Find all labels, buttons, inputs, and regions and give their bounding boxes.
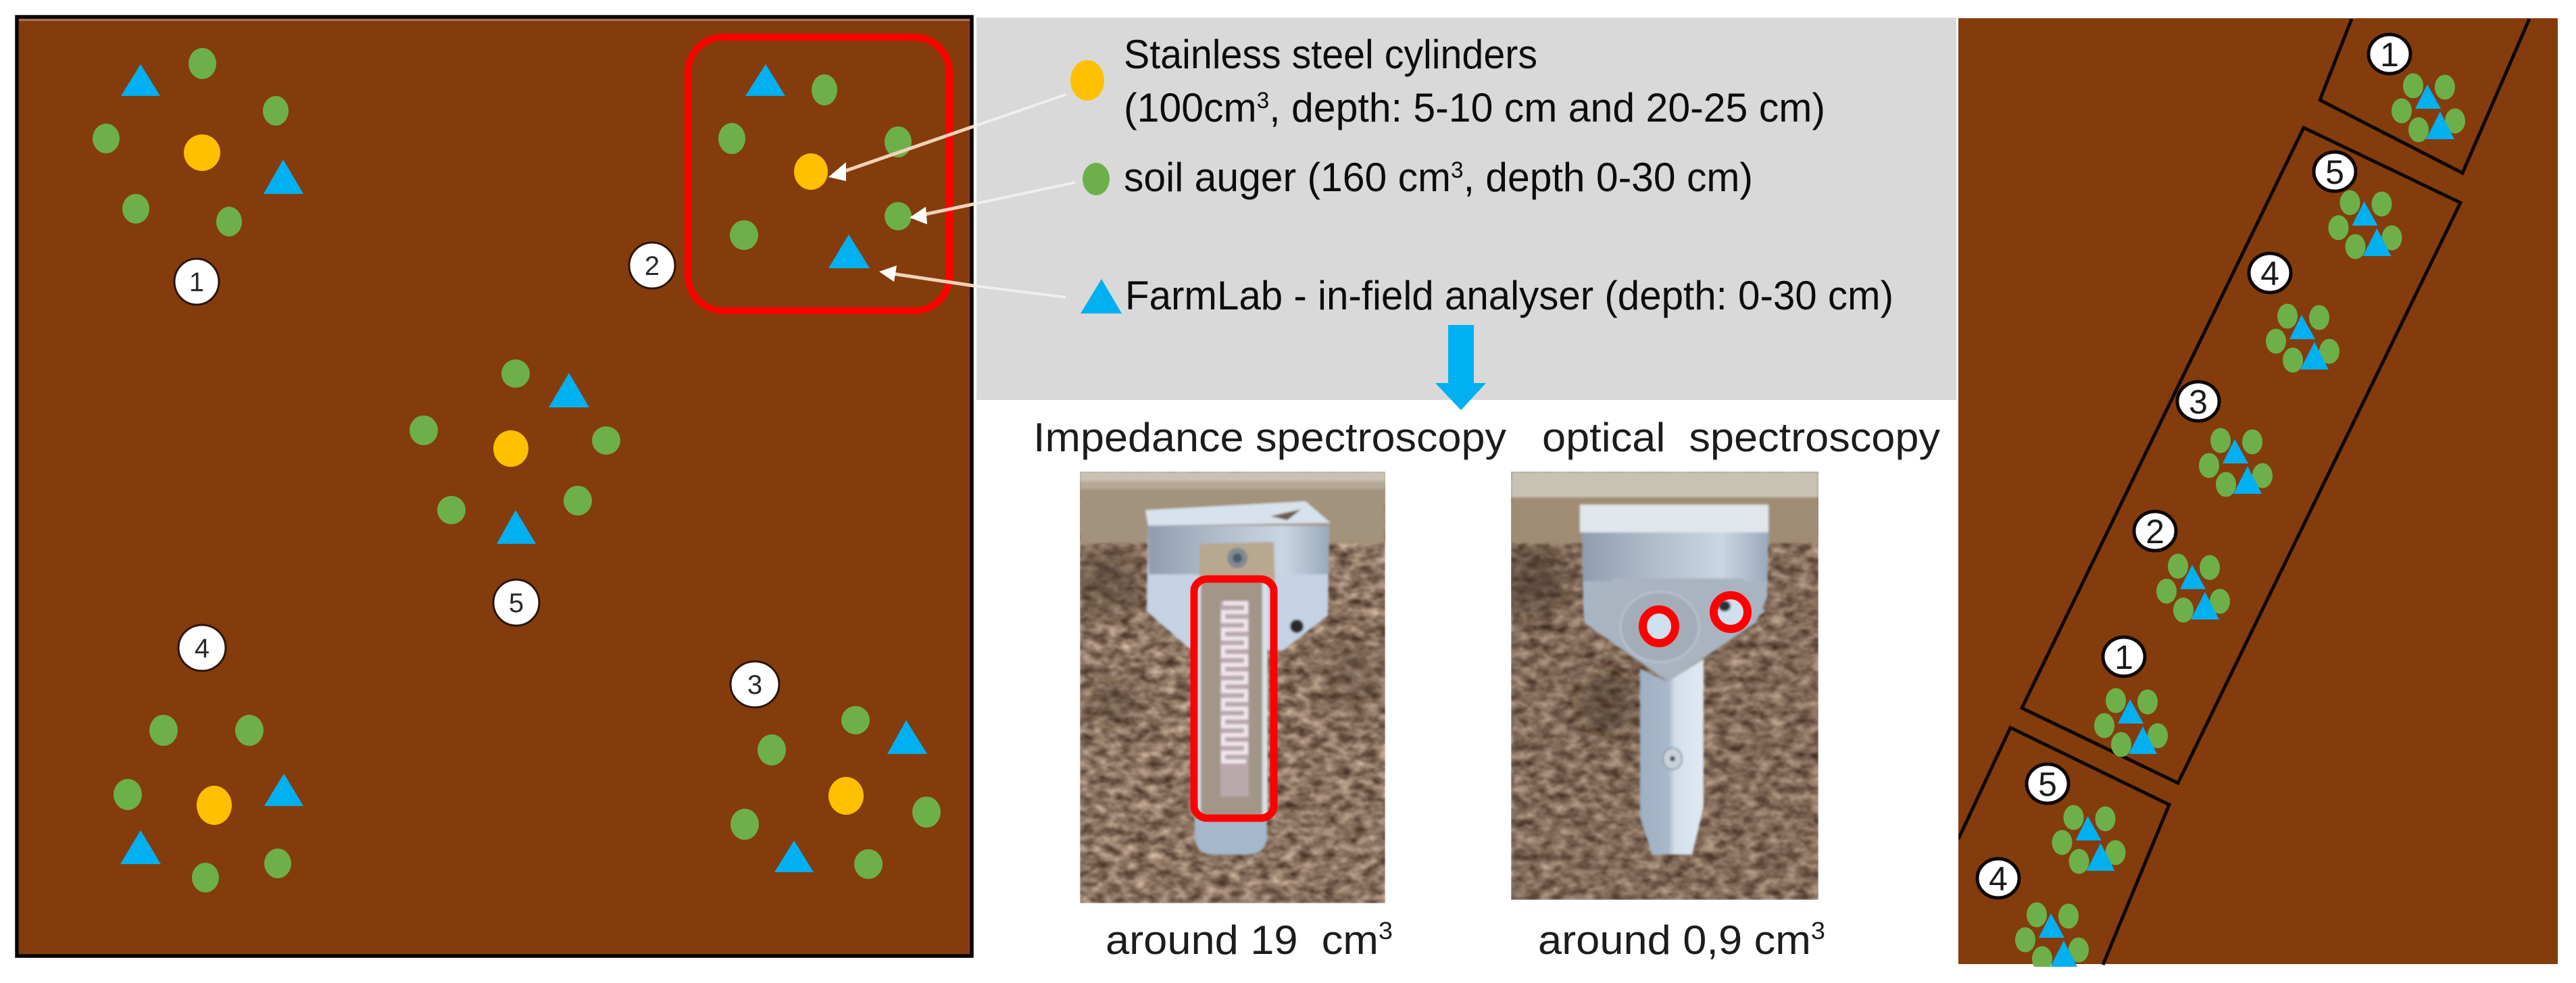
strip cluster 5 (lower) bbox=[2027, 764, 2126, 874]
strip cluster 3: 3 bbox=[2189, 383, 2208, 421]
strip cluster 4 (upper): 4 bbox=[2260, 255, 2279, 293]
strip cluster 1 (top): 1 bbox=[2380, 36, 2399, 74]
cluster 4: 4 bbox=[195, 634, 209, 663]
cluster 2 bbox=[629, 64, 912, 288]
heading: optical spectroscopy: optical spectroscopy bbox=[1542, 415, 1940, 460]
cluster 3 bbox=[730, 661, 941, 879]
arrow: legend down to sensors bbox=[1435, 325, 1486, 410]
arrow: FarmLab legend to plot bbox=[879, 266, 1066, 297]
legend: stainless steel cylinders: , depth: 5-10 cm and 20-25 cm) bbox=[1269, 85, 1825, 130]
strip cluster 4 (lower): 4 bbox=[1989, 860, 2008, 898]
plot outlines bbox=[1958, 19, 2529, 965]
strip cluster 1 (top) bbox=[2369, 34, 2465, 142]
legend: soil auger: , depth 0-30 cm) bbox=[1464, 155, 1753, 200]
cluster 2: 2 bbox=[645, 251, 660, 281]
legend: stainless steel cylinders: Stainless steel cylinders bbox=[1124, 32, 1537, 77]
photo: optical sensor bbox=[1504, 472, 1818, 900]
cluster 3: 3 bbox=[747, 670, 762, 700]
panel: field plot layout bbox=[17, 17, 972, 956]
heading: impedance spectroscopy: Impedance spectroscopy bbox=[1033, 415, 1506, 460]
caption: around 0,9 cm3: 3 bbox=[1811, 917, 1825, 944]
legend: stainless steel cylinders bbox=[1070, 32, 1825, 130]
cluster 5: 5 bbox=[509, 588, 524, 618]
strip cluster 5 (lower): 5 bbox=[2038, 765, 2057, 803]
legend: soil auger: soil auger (160 cm bbox=[1124, 155, 1458, 200]
arrow: cylinder legend to plot bbox=[828, 95, 1066, 181]
strip cluster 3 bbox=[2177, 382, 2273, 497]
caption: around 0,9 cm3: around 0,9 cm bbox=[1538, 917, 1798, 963]
legend: soil auger bbox=[1083, 155, 1753, 200]
highlight box around cluster 2 bbox=[688, 37, 949, 311]
panel: legend background bbox=[976, 18, 1956, 400]
strip cluster 4 (lower) bbox=[1977, 859, 2089, 972]
strip cluster 2: 2 bbox=[2146, 513, 2164, 551]
strip cluster 1 (middle): 1 bbox=[2114, 638, 2133, 676]
panel: strip plot layout bbox=[1958, 18, 2558, 972]
strip cluster 1 (middle) bbox=[2094, 637, 2168, 757]
strip cluster 5 (upper): 5 bbox=[2325, 153, 2344, 191]
photo: impedance sensor bbox=[1074, 472, 1385, 903]
legend: stainless steel cylinders: (100cm bbox=[1124, 85, 1259, 130]
strip cluster 5 (upper) bbox=[2314, 152, 2402, 259]
legend: stainless steel cylinders: 3 bbox=[1257, 88, 1269, 114]
arrow: auger legend to plot bbox=[910, 182, 1075, 224]
legend: soil auger: 3 bbox=[1451, 157, 1464, 183]
cluster 1: 1 bbox=[189, 268, 204, 297]
cluster 4 bbox=[114, 625, 303, 892]
strip cluster 2 bbox=[2134, 511, 2230, 623]
caption: around 19 cm3: around 19 cm bbox=[1106, 917, 1365, 963]
caption: around 19 cm3: 3 bbox=[1379, 917, 1393, 944]
cluster 5 bbox=[410, 359, 620, 626]
strip cluster 4 (upper) bbox=[2249, 253, 2339, 373]
legend: FarmLab analyser: FarmLab - in-field analyser (depth: 0-30 cm) bbox=[1125, 273, 1893, 318]
cluster 1 bbox=[93, 48, 303, 305]
